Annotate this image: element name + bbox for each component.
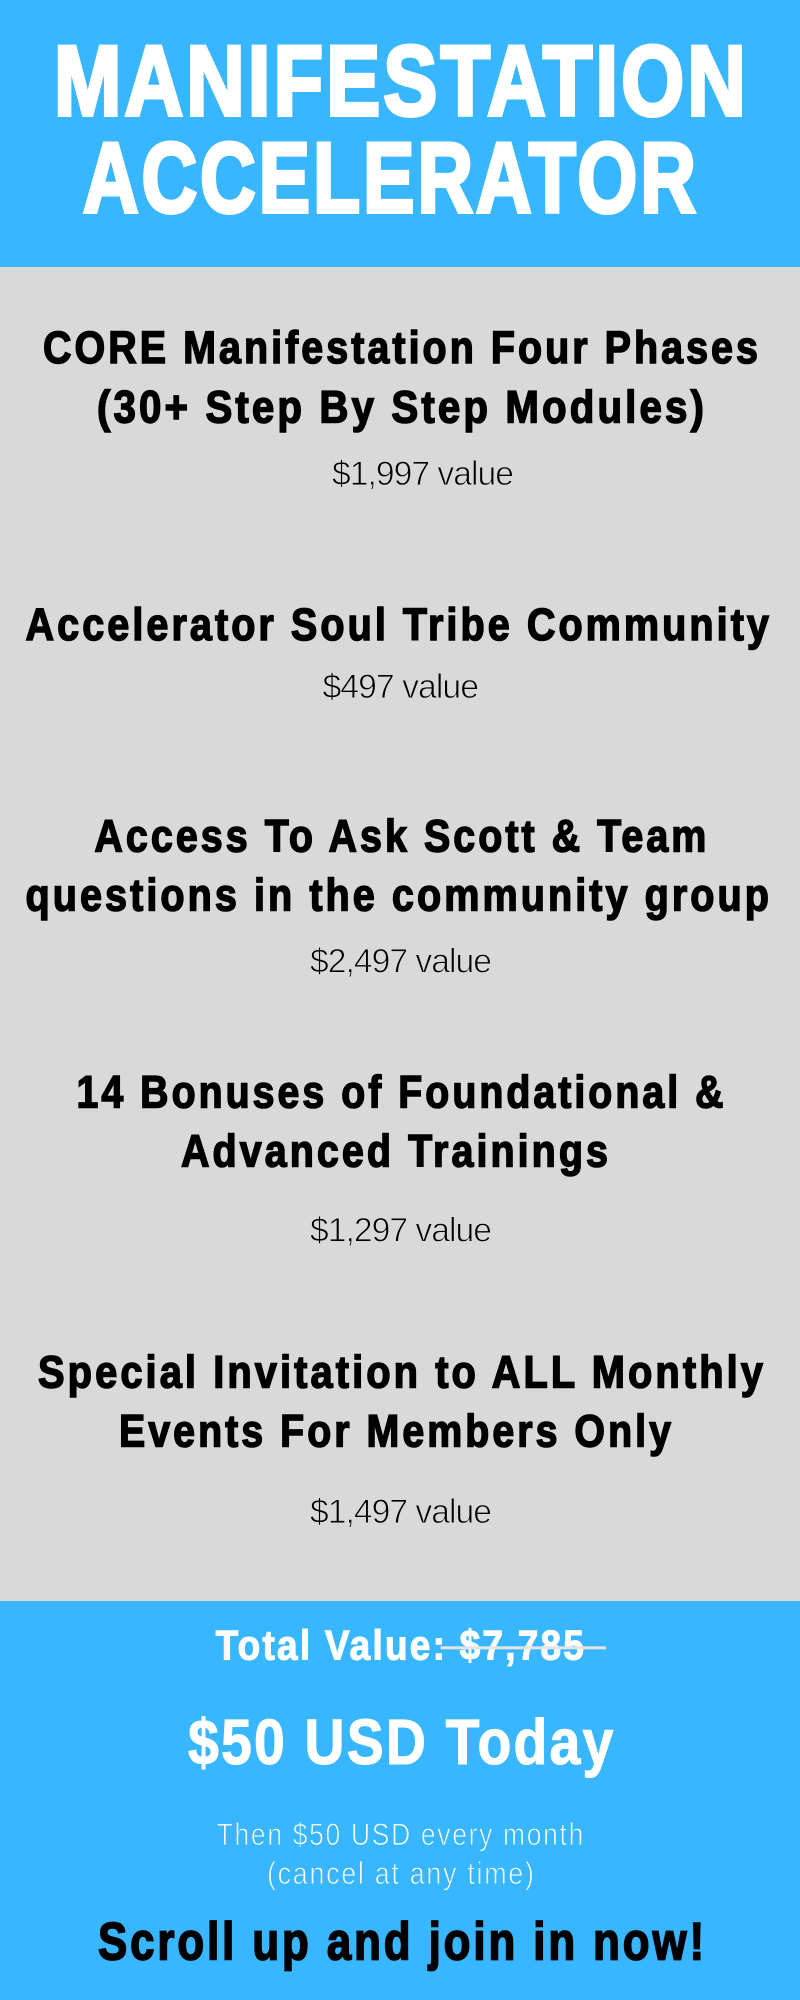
monthly terms: [217, 1816, 585, 1891]
item: soul tribe community: $497 value: [322, 668, 478, 706]
item: monthly events: [38, 1347, 766, 1531]
price today: $50 USD Today: [188, 1706, 616, 1778]
item: monthly events: Events For Members Only: [119, 1406, 674, 1457]
item: bonuses: Advanced Trainings: [181, 1126, 611, 1177]
monthly terms: Then $50 USD every month: [217, 1816, 585, 1852]
item: ask scott and team: [26, 811, 772, 981]
item: monthly events: $1,497 value: [310, 1493, 491, 1531]
panel: pricing: [0, 1601, 800, 2000]
item: ask scott and team: Access To Ask Scott & Team: [94, 811, 709, 862]
panel: header: [0, 0, 800, 267]
item: core phases: (30+ Step By Step Modules): [97, 382, 707, 433]
title: [54, 25, 749, 233]
monthly terms: (cancel at any time): [267, 1855, 536, 1891]
panel: value list: [0, 267, 800, 1601]
item: core phases: [43, 322, 761, 493]
total value: Total Value: $7,785: [216, 1622, 586, 1668]
item: core phases: $1,997 value: [332, 455, 513, 493]
item: bonuses: [76, 1067, 726, 1250]
item: soul tribe community: [26, 599, 772, 706]
item: ask scott and team: $2,497 value: [310, 943, 491, 981]
item: bonuses: $1,297 value: [310, 1212, 491, 1250]
